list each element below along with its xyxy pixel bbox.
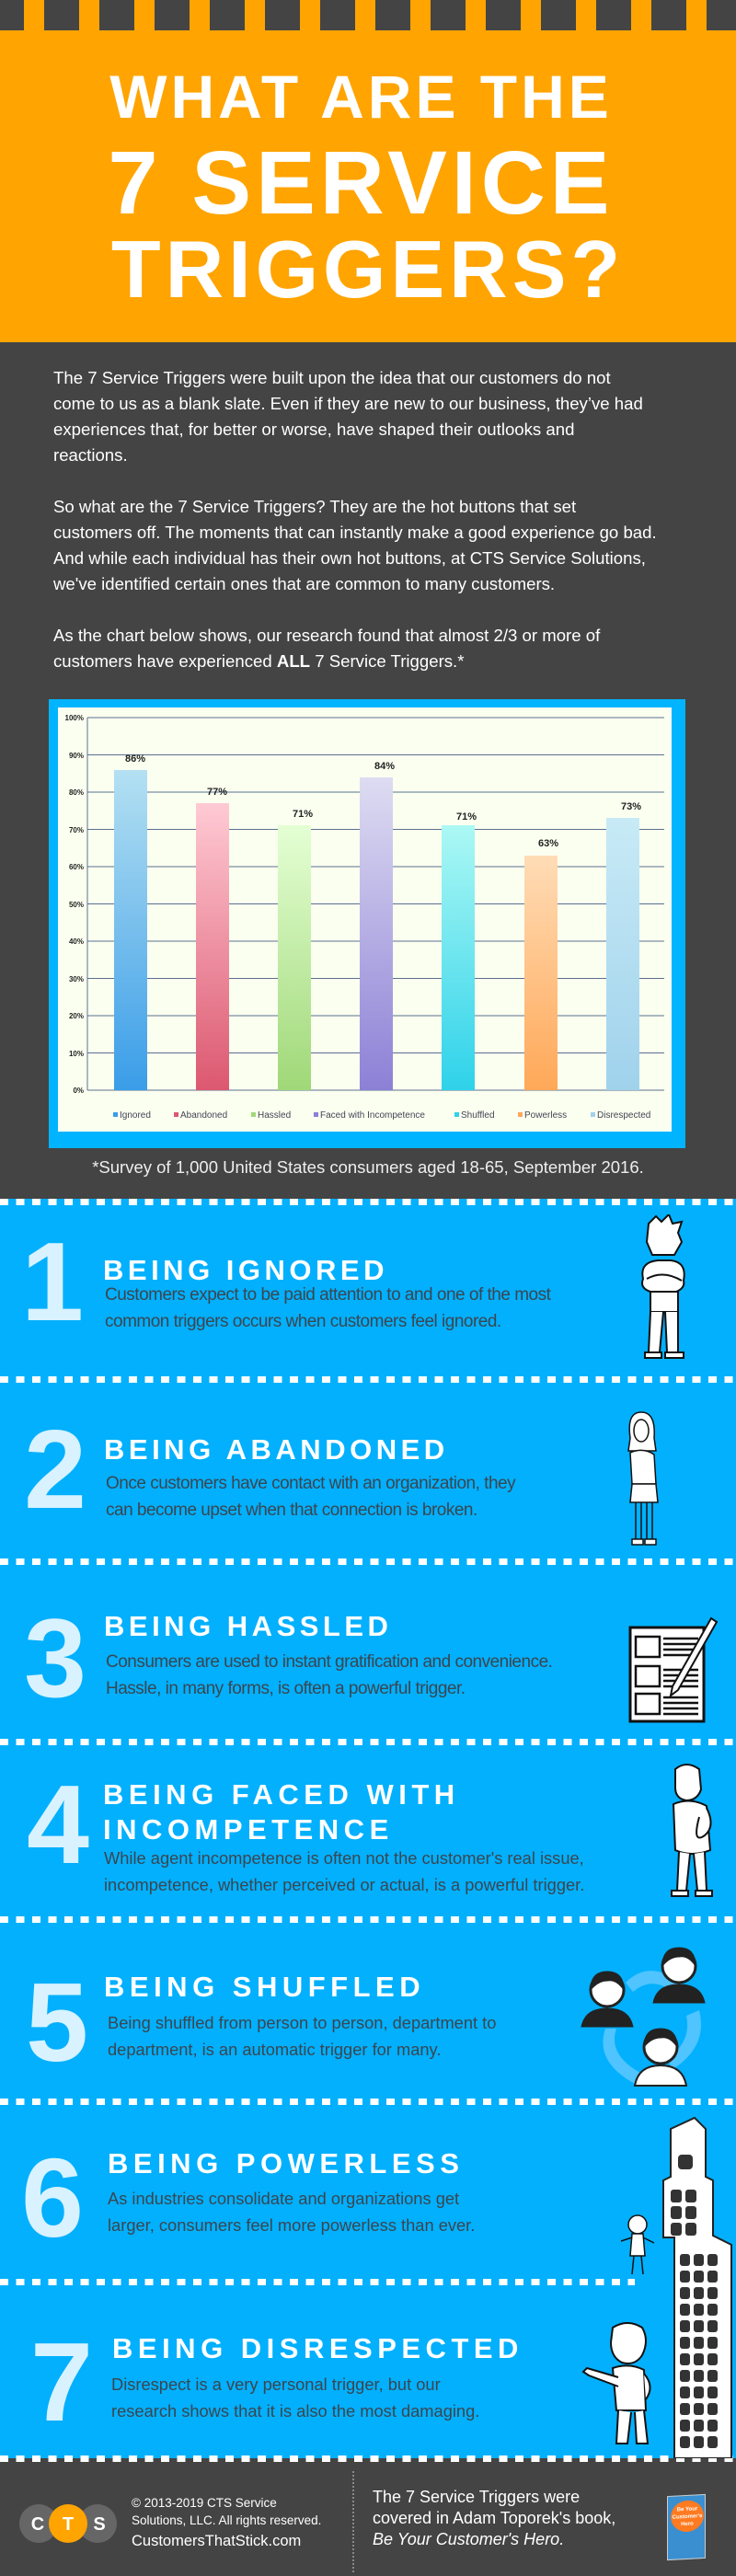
header notch strip — [0, 0, 736, 31]
heading: INCOMPETENCE — [103, 1813, 394, 1846]
title: 7 SERVICE — [109, 132, 615, 233]
intro text — [53, 368, 657, 671]
intro text: As the chart below shows, our research found that almost 2/3 or more of — [53, 626, 600, 645]
bar chart: 84% — [374, 761, 395, 772]
bar chart: 40% — [69, 937, 84, 946]
body: incompetence, whether perceived or actual, is a powerful trigger. — [104, 1875, 584, 1894]
intro text: So what are the 7 Service Triggers? They are the hot buttons that set — [53, 497, 576, 516]
intro text: And while each individual has their own hot buttons, at CTS Service Solutions, — [53, 548, 646, 568]
icon: call center agents — [581, 1947, 706, 2087]
body: larger, consumers feel more powerless than ever. — [108, 2215, 475, 2235]
book credit text: Be Your Customer's Hero. — [373, 2530, 564, 2548]
body: As industries consolidate and organizations get — [108, 2189, 459, 2208]
bar chart: 100% — [65, 714, 84, 722]
bar chart: 20% — [69, 1012, 84, 1020]
section 2: being abandoned — [24, 1407, 659, 1546]
icon: man pointing — [581, 2322, 651, 2444]
body — [111, 2375, 479, 2421]
icon: woman standing — [627, 1411, 659, 1546]
intro text: we've identified certain ones that are common to many customers. — [53, 574, 555, 593]
section 5: being shuffled — [26, 1947, 706, 2087]
body: While agent incompetence is often not the customer's real issue, — [104, 1848, 584, 1868]
bar chart — [49, 699, 685, 1148]
bar chart: Ignored — [120, 1110, 151, 1121]
body: Hassle, in many forms, is often a powerful trigger. — [106, 1679, 466, 1698]
number 7: 7 — [30, 2319, 93, 2444]
body: department, is an automatic trigger for many. — [108, 2040, 441, 2059]
body: common triggers occurs when customers feel ignored. — [105, 1312, 501, 1331]
icon: book cover — [667, 2494, 706, 2560]
copyright text: CustomersThatStick.com — [132, 2533, 301, 2549]
bar chart: 0% — [73, 1087, 84, 1095]
intro text: customers have experienced ALL 7 Service Triggers.* — [53, 651, 464, 671]
intro text: experiences that, for better or worse, have shaped their outlooks and — [53, 420, 574, 439]
icon: skyscraper — [662, 2116, 732, 2458]
logo: CTS: S — [93, 2514, 106, 2535]
heading: BEING FACED WITH — [103, 1778, 460, 1811]
body — [108, 2013, 496, 2059]
copyright text: © 2013-2019 CTS Service — [132, 2496, 277, 2510]
body — [105, 1285, 551, 1331]
footer — [0, 2462, 736, 2576]
bar chart: 77% — [207, 787, 227, 798]
intro text: reactions. — [53, 445, 128, 465]
divider — [352, 2471, 354, 2572]
heading: BEING IGNORED — [103, 1254, 388, 1286]
bar chart: 70% — [69, 826, 84, 834]
bar chart: 90% — [69, 752, 84, 760]
book credit text: The 7 Service Triggers were — [373, 2488, 580, 2506]
copyright text: Solutions, LLC. All rights reserved. — [132, 2513, 321, 2527]
bar chart: Disrespected — [597, 1110, 650, 1121]
body — [104, 1848, 584, 1894]
bar chart: 30% — [69, 975, 84, 983]
bar chart: Powerless — [524, 1110, 567, 1121]
number 4: 4 — [27, 1762, 89, 1887]
body: research shows that it is also the most damaging. — [111, 2401, 479, 2421]
bar chart: Shuffled — [461, 1110, 495, 1121]
bar chart: 50% — [69, 901, 84, 909]
bar chart: 86% — [125, 753, 145, 765]
heading: BEING DISRESPECTED — [112, 2332, 523, 2364]
body: Disrespect is a very personal trigger, but our — [111, 2375, 441, 2394]
bar chart: 71% — [293, 809, 313, 820]
bar chart: 10% — [69, 1050, 84, 1058]
icon: confused man — [671, 1764, 713, 1897]
icon: small girl — [620, 2214, 655, 2274]
intro text: customers off. The moments that can instantly make a good experience go bad. — [53, 523, 657, 542]
bar chart: 71% — [456, 811, 477, 822]
body: Being shuffled from person to person, department to — [108, 2013, 496, 2032]
number 3: 3 — [24, 1595, 86, 1720]
logo: CTS: T — [63, 2514, 74, 2535]
icon: checklist with pencil — [629, 1617, 718, 1722]
number 1: 1 — [21, 1219, 84, 1344]
heading — [103, 1778, 460, 1846]
bar chart: Faced with Incompetence — [320, 1110, 425, 1121]
heading: BEING HASSLED — [104, 1610, 392, 1642]
section 7: being disrespected — [30, 2319, 651, 2444]
body: can become upset when that connection is broken. — [106, 1501, 477, 1520]
section 3: being hassled — [24, 1595, 718, 1722]
bar chart: Abandoned — [180, 1110, 227, 1121]
icon: man arms crossed — [641, 1214, 685, 1359]
body — [106, 1474, 515, 1520]
bar chart: 80% — [69, 788, 84, 797]
body — [106, 1652, 552, 1698]
body: Consumers are used to instant gratification and convenience. — [106, 1652, 552, 1672]
bar chart: 73% — [621, 801, 641, 812]
number 2: 2 — [24, 1407, 86, 1532]
heading: BEING POWERLESS — [108, 2147, 464, 2179]
heading: BEING SHUFFLED — [104, 1971, 425, 2003]
blue trigger sections background — [0, 1199, 736, 2458]
intro text: The 7 Service Triggers were built upon the idea that our customers do not — [53, 368, 611, 387]
body: Once customers have contact with an organization, they — [106, 1474, 515, 1493]
title: TRIGGERS? — [111, 224, 625, 315]
book credit text — [373, 2488, 615, 2548]
header banner — [0, 30, 736, 342]
body: Customers expect to be paid attention to and one of the most — [105, 1285, 550, 1305]
section 1: being ignored — [21, 1214, 685, 1359]
bar chart: 60% — [69, 863, 84, 871]
title: WHAT ARE THE — [109, 63, 613, 131]
title — [109, 63, 625, 315]
copyright text — [132, 2496, 321, 2549]
logo: CTS: C — [31, 2514, 44, 2535]
logo: CTS — [19, 2504, 117, 2543]
number 6: 6 — [21, 2135, 84, 2260]
book credit text: covered in Adam Toporek's book, — [373, 2509, 615, 2527]
number 5: 5 — [26, 1960, 88, 2085]
footnote: *Survey of 1,000 United States consumers aged 18-65, September 2016. — [92, 1157, 644, 1177]
section 6: being powerless — [21, 2135, 655, 2274]
section 4: being faced with incompetence — [27, 1762, 713, 1897]
bar chart: 63% — [538, 838, 558, 849]
icon: book cover: Be Your Customer's Hero — [673, 2506, 702, 2527]
bar chart: Hassled — [258, 1110, 291, 1121]
intro text: come to us as a blank slate. Even if they are new to our business, they’ve had — [53, 394, 643, 413]
heading: BEING ABANDONED — [104, 1433, 449, 1466]
body — [108, 2189, 475, 2235]
